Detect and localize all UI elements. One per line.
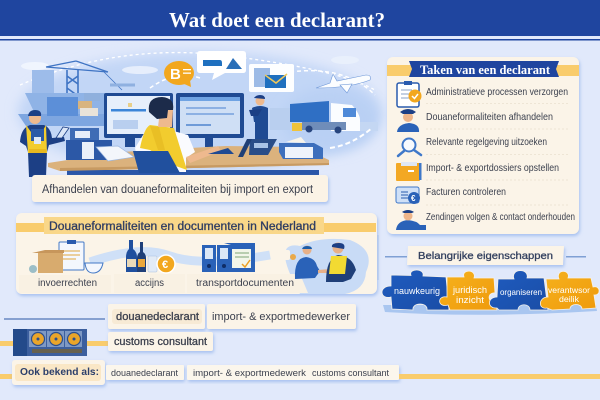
heading: [16, 217, 376, 234]
puzzle piece: juridisch inzicht: [440, 271, 497, 310]
task 5: Facturen controleren: [426, 186, 506, 198]
icon: coin chat bubble: [164, 61, 194, 87]
title: Wat doet een declarant?: [169, 8, 385, 32]
icon: coin chat bubble: B: [170, 66, 181, 83]
icon: invoice with euro: €: [411, 194, 416, 203]
icon: clipboard: [397, 81, 422, 107]
icon: printer right: [279, 137, 323, 159]
heading: belangrijke eigenschappen: Belangrijke eigenschappen: [418, 250, 553, 262]
tag: douanedeclarant small: douanedeclarant: [111, 368, 178, 378]
header band: [0, 0, 600, 40]
icon: printer and files: [66, 128, 134, 161]
puzzle piece: nauwkeurig: [382, 270, 449, 310]
icon: speech bubble: [197, 51, 246, 80]
puzzle piece: juridisch inzicht: inzicht: [456, 295, 485, 305]
vertical divider: [378, 235, 379, 280]
puzzle piece: juridisch inzicht: juridisch: [452, 285, 487, 295]
tag: douanedeclarant: douanedeclarant: [116, 311, 199, 323]
tag: douanedeclarant small: [106, 365, 184, 380]
puzzle piece: organiseren: organiseren: [500, 287, 542, 297]
heading: Douaneformaliteiten en documenten in Nederland: [49, 221, 316, 233]
icon: handshake workers: [276, 242, 356, 282]
caption: Afhandelen van douaneformaliteiten bij import en export: [42, 184, 314, 196]
heading ribbon: [387, 61, 579, 77]
connector band: [0, 341, 108, 346]
puzzle piece: verantwoordelijk: verantwsor: [548, 285, 590, 295]
tag: customs consultant: [108, 332, 213, 351]
icon: airplane: [316, 74, 370, 93]
task 3: Relevante regelgeving uitzoeken: [426, 136, 547, 148]
hero illustration: [18, 51, 382, 177]
icon: binders and document: [202, 243, 255, 272]
panel: douaneformaliteiten en documenten: [16, 213, 377, 294]
icon: left monitor: [104, 93, 173, 147]
icon: fan machine: [13, 329, 87, 356]
icon: folder: [396, 162, 422, 181]
panel: taken van een declarant: [387, 57, 579, 234]
tag: customs consultant: customs consultant: [114, 336, 207, 348]
label: ook bekend als: Ook bekend als:: [20, 366, 99, 378]
heading ribbon: Taken van een declarant: [420, 63, 551, 77]
puzzle piece: organiseren: [490, 271, 548, 310]
task 2: Douaneformaliteiten afhandelen: [426, 111, 553, 123]
icon: seated declarant: [133, 97, 234, 173]
tag: import and customs small: [187, 365, 399, 380]
desk: [48, 146, 329, 171]
icon: right monitor: [176, 93, 244, 147]
icon: bottles and euro coin: [126, 240, 175, 273]
heading: belangrijke eigenschappen: [385, 246, 586, 265]
icon: delivery truck: [290, 101, 360, 134]
icon: worker with tablet: [20, 110, 69, 177]
puzzle: eigenschappen: [382, 270, 599, 315]
tag: import and customs small: import- & exportmedewerk: [193, 368, 306, 379]
icon: desk phone: [238, 139, 277, 157]
icon: harbour crane: [46, 61, 135, 98]
icon: bottles and euro coin: €: [162, 259, 168, 271]
connector line: [4, 318, 105, 320]
icon: envelope bubble: [249, 64, 294, 92]
label: invoerrechten tab: [19, 275, 111, 293]
tag: import- en exportmedewerker: [207, 304, 356, 329]
band right: [399, 374, 600, 379]
tag: douanedeclarant: [108, 304, 205, 329]
icon: magnifier: [398, 138, 421, 156]
icon: box and clipboard: [29, 240, 103, 273]
icon: crates beside truck: [270, 108, 378, 131]
icon: officer with parcel: [396, 210, 426, 230]
puzzle piece: verantwoordelijk: [540, 271, 599, 310]
icon: invoice with euro: [396, 187, 420, 204]
label: invoerrechten tab: invoerrechten: [38, 278, 97, 289]
label: transportdocumenten tab: [187, 274, 308, 293]
label: accijns tab: [114, 274, 185, 293]
icon: container ship: [18, 70, 105, 126]
tag: import and customs small: customs consultant: [312, 368, 389, 379]
caption: [32, 175, 328, 202]
tag: import- en exportmedewerker: import- & exportmedewerker: [212, 311, 350, 323]
puzzle piece: verantwoordelijk: deilik: [559, 294, 580, 304]
label: accijns tab: accijns: [135, 278, 164, 289]
puzzle piece: nauwkeurig: nauwkeurig: [394, 286, 440, 296]
task 4: Import- & exportdossiers opstellen: [426, 162, 559, 174]
label: ook bekend als: [12, 360, 105, 385]
task 1: Administratieve processen verzorgen: [426, 86, 568, 98]
swoosh behind workers: [285, 239, 369, 294]
icon: standing colleague with clipboard: [249, 95, 268, 140]
icon: customs officer: [397, 109, 419, 132]
band left of ook bekend als: [0, 374, 12, 379]
label: transportdocumenten tab: transportdocumenten: [196, 278, 294, 289]
